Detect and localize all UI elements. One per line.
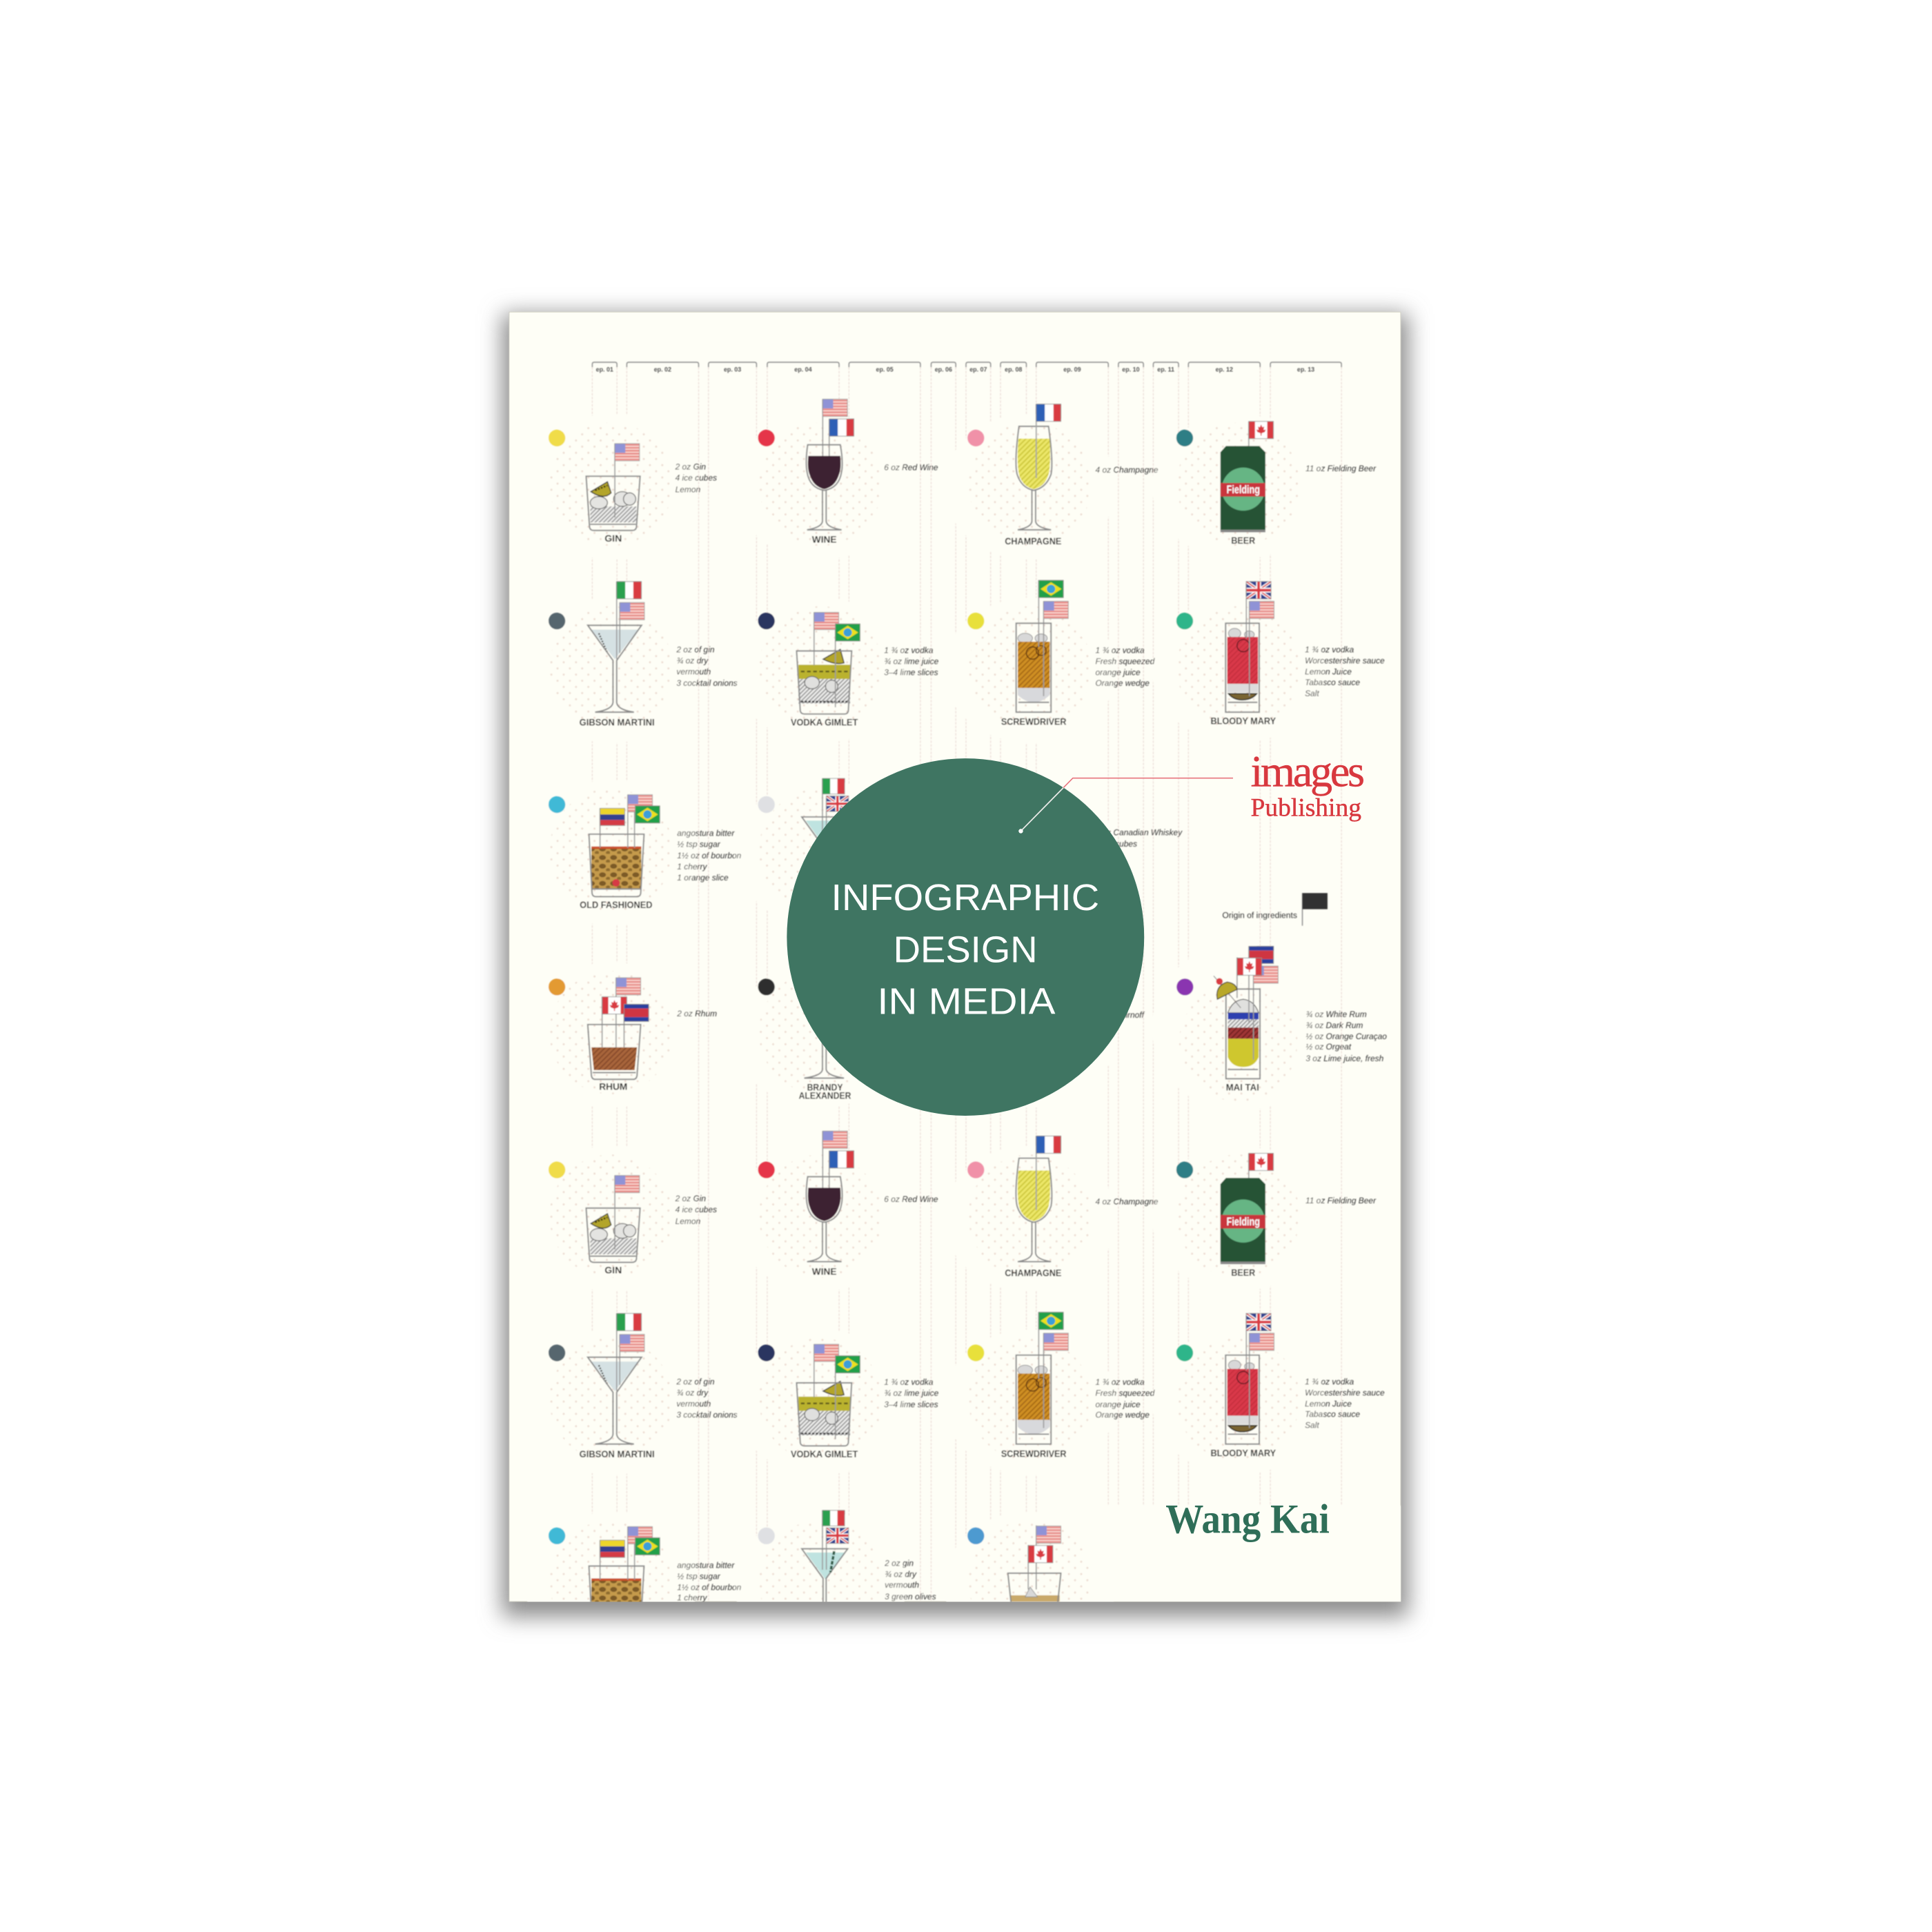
panel: mai tai <box>1176 946 1387 1093</box>
ingredients: 1 cherry <box>677 862 707 871</box>
icon: whiskey glass <box>1008 1526 1061 1608</box>
panel: book cover <box>509 312 1401 1657</box>
drink name: BLOODY MARY <box>1210 1448 1276 1459</box>
ingredients: 2 oz Smirnoff <box>1095 1010 1145 1020</box>
icon: martini glass <box>588 582 644 712</box>
ingredients: 1 ¾ oz vodka <box>1305 645 1354 655</box>
ingredients: 2 oz Canadian Whiskey <box>1095 828 1183 838</box>
drink name: BRANDY <box>807 1082 843 1093</box>
icon: martini glass <box>588 1314 644 1444</box>
ingredients: ¾ oz dry <box>676 656 709 666</box>
ingredients: angostura bitter <box>677 1560 735 1570</box>
ingredients: Lemon Juice <box>1305 1399 1352 1408</box>
ingredients: ½ oz Orgeat <box>1305 1042 1352 1052</box>
ingredients: 4 oz Champagne <box>1096 1197 1159 1207</box>
publisher logo: images <box>1250 747 1363 796</box>
panel: gin repeat <box>549 1161 717 1276</box>
drink name: BEER <box>1231 535 1256 546</box>
panel: vodka gimlet repeat <box>758 1344 939 1460</box>
ingredients: Orange wedge <box>1096 678 1150 688</box>
drink name: CHAMPAGNE <box>1005 1268 1061 1279</box>
ingredients: ½ oz Orange Curaçao <box>1305 1032 1387 1041</box>
panel: wine repeat <box>758 1131 938 1277</box>
ingredients: Worcestershire sauce <box>1305 1388 1385 1397</box>
ingredients: 2 oz gin <box>884 1559 914 1568</box>
ingredients: vermouth <box>885 1580 919 1590</box>
ingredients: Tabasco sauce <box>1305 1410 1360 1419</box>
ingredients: Worcestershire sauce <box>1305 656 1385 666</box>
panel: rhum <box>549 978 717 1092</box>
ingredients: orange juice <box>1096 668 1141 678</box>
ingredients: 1 ¾ oz vodka <box>1096 1377 1145 1387</box>
legend: origin of ingredients: Origin of ingredients <box>1222 910 1297 920</box>
drink name: VODKA GIMLET <box>791 1449 858 1460</box>
ingredients: 4 ice cubes <box>676 1205 717 1214</box>
panel: martini repeat <box>758 1510 936 1630</box>
ingredients: ½ tsp sugar <box>677 840 721 849</box>
drink name: RHUM <box>599 1081 627 1092</box>
drink name: GIN <box>604 533 622 544</box>
panel: martini behind title disc <box>758 778 917 898</box>
panel: bloody mary <box>1176 582 1385 727</box>
ingredients: orange juice <box>1096 1399 1141 1409</box>
ingredients: 4 oz Champagne <box>1096 465 1159 475</box>
ingredients: 3 oz Lime juice, fresh <box>1305 1054 1384 1063</box>
ingredients: 3 cocktail onions <box>676 1410 738 1419</box>
ingredients: vermouth <box>676 1399 711 1408</box>
can brand: Fielding <box>1227 1215 1260 1228</box>
drink name: SCREWDRIVER <box>1001 717 1067 728</box>
episode bracket header: ep. 04 <box>794 366 812 373</box>
ingredients: 3 cocktail onions <box>676 678 738 688</box>
episode bracket header: ep. 07 <box>969 366 987 373</box>
drink name: WINE <box>812 1266 836 1277</box>
ingredients: Tabasco sauce <box>1305 678 1360 687</box>
drink name: GIBSON MARTINI <box>580 1449 655 1460</box>
panel: screwdriver <box>967 580 1155 728</box>
legend: origin of ingredients <box>1222 893 1328 926</box>
ingredients: ¾ oz lime juice <box>884 657 939 667</box>
ingredients: 2 oz Rhum <box>676 1009 717 1018</box>
olives <box>831 1551 834 1573</box>
panel: wine <box>758 400 938 546</box>
ingredients: 2 oz Gin <box>675 1194 706 1203</box>
title: DESIGN <box>894 930 1038 971</box>
episode bracket header: ep. 08 <box>1005 366 1022 373</box>
panel: old fashioned <box>549 795 742 911</box>
ingredients: 3–4 lime slices <box>884 1399 938 1409</box>
panel: brandy alexander <box>758 978 851 1102</box>
ingredients: Lemon Juice <box>1305 667 1352 677</box>
drink name: CHAMPAGNE <box>1005 536 1061 547</box>
ingredients: Fresh squeezed <box>1096 1388 1155 1398</box>
icon: martini stem <box>805 1023 844 1078</box>
ingredients: Orange wedge <box>1096 1410 1150 1419</box>
episode bracket header: ep. 13 <box>1297 366 1314 373</box>
drink name: ALEXANDER <box>799 1091 851 1102</box>
ingredients: Salt <box>1305 1421 1319 1430</box>
icon: gimlet glass <box>796 613 860 714</box>
episode bracket header <box>592 362 1341 373</box>
ingredients: Salt <box>1305 689 1319 698</box>
ingredients: 3 green olives <box>885 1592 936 1601</box>
ingredients: Fresh squeezed <box>1096 657 1155 667</box>
panel: old fashioned repeat <box>549 1526 742 1628</box>
book cover drop shadow <box>502 314 1408 1617</box>
drink name: BEER <box>1231 1268 1256 1279</box>
ingredients: 1 ¾ oz vodka <box>1096 645 1145 655</box>
panel: drinks grid <box>525 362 1401 1657</box>
icon: gin glass <box>586 1176 640 1262</box>
icon: highball glass <box>1016 1312 1068 1444</box>
title: IN MEDIA <box>877 982 1056 1023</box>
drink name: OLD FASHIONED <box>580 900 653 911</box>
icon: beer can <box>1221 1153 1274 1264</box>
ingredients: 2 oz gin <box>884 828 914 838</box>
episode bracket header: ep. 01 <box>596 366 613 373</box>
panel: champagne <box>967 404 1159 547</box>
ingredients: 2 oz Gin <box>675 462 706 471</box>
ingredients: 1 ¾ oz vodka <box>884 645 934 655</box>
ingredients: ¾ oz dry <box>885 839 917 849</box>
ingredients: Lemon <box>676 484 700 494</box>
icon: gin glass <box>586 444 640 531</box>
ingredients: 1 orange slice <box>677 873 729 883</box>
drink name: BLOODY MARY <box>1210 716 1276 727</box>
panel: beer repeat <box>1176 1153 1377 1279</box>
ingredients: 2 oz of gin <box>676 645 715 655</box>
episode bracket header: ep. 11 <box>1157 366 1174 373</box>
can brand: Fielding <box>1227 483 1260 496</box>
title: INFOGRAPHIC <box>831 878 1099 918</box>
ingredients: 4 ice cubes <box>1096 839 1137 849</box>
icon: beer can <box>1221 422 1274 532</box>
icon: highball glass <box>1016 580 1068 712</box>
drink name: GIN <box>604 1265 622 1276</box>
episode bracket header: ep. 03 <box>724 366 741 373</box>
title <box>831 878 1099 1023</box>
ingredients: ¾ oz White Rum <box>1305 1009 1367 1019</box>
episode bracket header: ep. 06 <box>935 366 952 373</box>
ingredients: 1 ¾ oz vodka <box>884 1377 934 1387</box>
ingredients: ¾ oz dry <box>885 1570 917 1579</box>
panel: gibson martini <box>549 582 738 728</box>
ingredients: 3–4 lime slices <box>884 668 938 678</box>
author name: Wang Kai <box>1165 1496 1330 1542</box>
icon: martini glass <box>802 1510 849 1630</box>
panel: beer <box>1176 422 1377 546</box>
drink name: VODKA GIMLET <box>791 717 858 728</box>
icon: rocks glass <box>589 1526 660 1628</box>
icon: mai tai glass <box>1214 946 1278 1078</box>
panel: screwdriver repeat <box>967 1312 1155 1459</box>
ingredients: 6 oz Red Wine <box>884 462 938 472</box>
panel: gibson martini repeat <box>549 1314 738 1460</box>
episode bracket header: ep. 10 <box>1122 366 1140 373</box>
icon: wine glass <box>806 1131 854 1262</box>
episode bracket header: ep. 02 <box>654 366 671 373</box>
episode bracket header: ep. 12 <box>1216 366 1233 373</box>
ingredients: 1 cherry <box>677 1593 707 1603</box>
drink name: SCREWDRIVER <box>1001 1448 1067 1459</box>
panel: gin <box>549 430 717 544</box>
ingredients: ¾ oz Dark Rum <box>1305 1021 1363 1030</box>
ingredients: ¾ oz dry <box>676 1388 709 1397</box>
drink name: GIBSON MARTINI <box>580 717 655 728</box>
ingredients: 1 ¾ oz vodka <box>1305 1377 1354 1386</box>
ingredients: vermouth <box>676 667 711 677</box>
panel: whiskey repeat <box>967 1526 1061 1608</box>
icon: champagne flute <box>1016 1136 1061 1262</box>
icon: champagne flute <box>1016 404 1061 530</box>
ingredients: 2 oz of gin <box>676 1377 715 1386</box>
ingredients: 4 ice cubes <box>676 473 717 482</box>
ingredients: ½ tsp sugar <box>677 1571 721 1581</box>
episode bracket header: ep. 09 <box>1063 366 1081 373</box>
ingredients: 6 oz Red Wine <box>884 1194 938 1204</box>
icon: rocks glass <box>588 978 649 1079</box>
icon: highball glass <box>1225 582 1274 712</box>
drink name: MAI TAI <box>1226 1082 1259 1093</box>
icon: wine glass <box>806 400 854 530</box>
panel: champagne repeat <box>967 1136 1159 1279</box>
ingredients: Lemon <box>676 1216 700 1226</box>
icon: rocks glass <box>589 795 660 896</box>
ingredients: 11 oz Fielding Beer <box>1305 1196 1377 1205</box>
episode bracket header: ep. 05 <box>876 366 894 373</box>
icon: martini glass <box>802 778 849 898</box>
ingredients: 1½ oz of bourbon <box>677 851 742 860</box>
drink name: WINE <box>812 535 836 546</box>
publisher leader line <box>1018 778 1233 834</box>
ingredients: ¾ oz lime juice <box>884 1388 939 1398</box>
publisher logo: Publishing <box>1250 794 1361 822</box>
panel: whiskey behind title disc <box>1094 828 1183 849</box>
icon: highball glass <box>1225 1314 1274 1444</box>
icon: gimlet glass <box>796 1344 860 1446</box>
title disc <box>787 758 1144 1116</box>
ingredients: 1½ oz of bourbon <box>677 1582 742 1592</box>
panel: bloody mary repeat <box>1176 1314 1385 1459</box>
ingredients: 11 oz Fielding Beer <box>1305 464 1377 473</box>
ingredients: angostura bitter <box>677 829 735 838</box>
panel: vodka gimlet <box>758 613 939 728</box>
publisher logo <box>1250 747 1363 822</box>
